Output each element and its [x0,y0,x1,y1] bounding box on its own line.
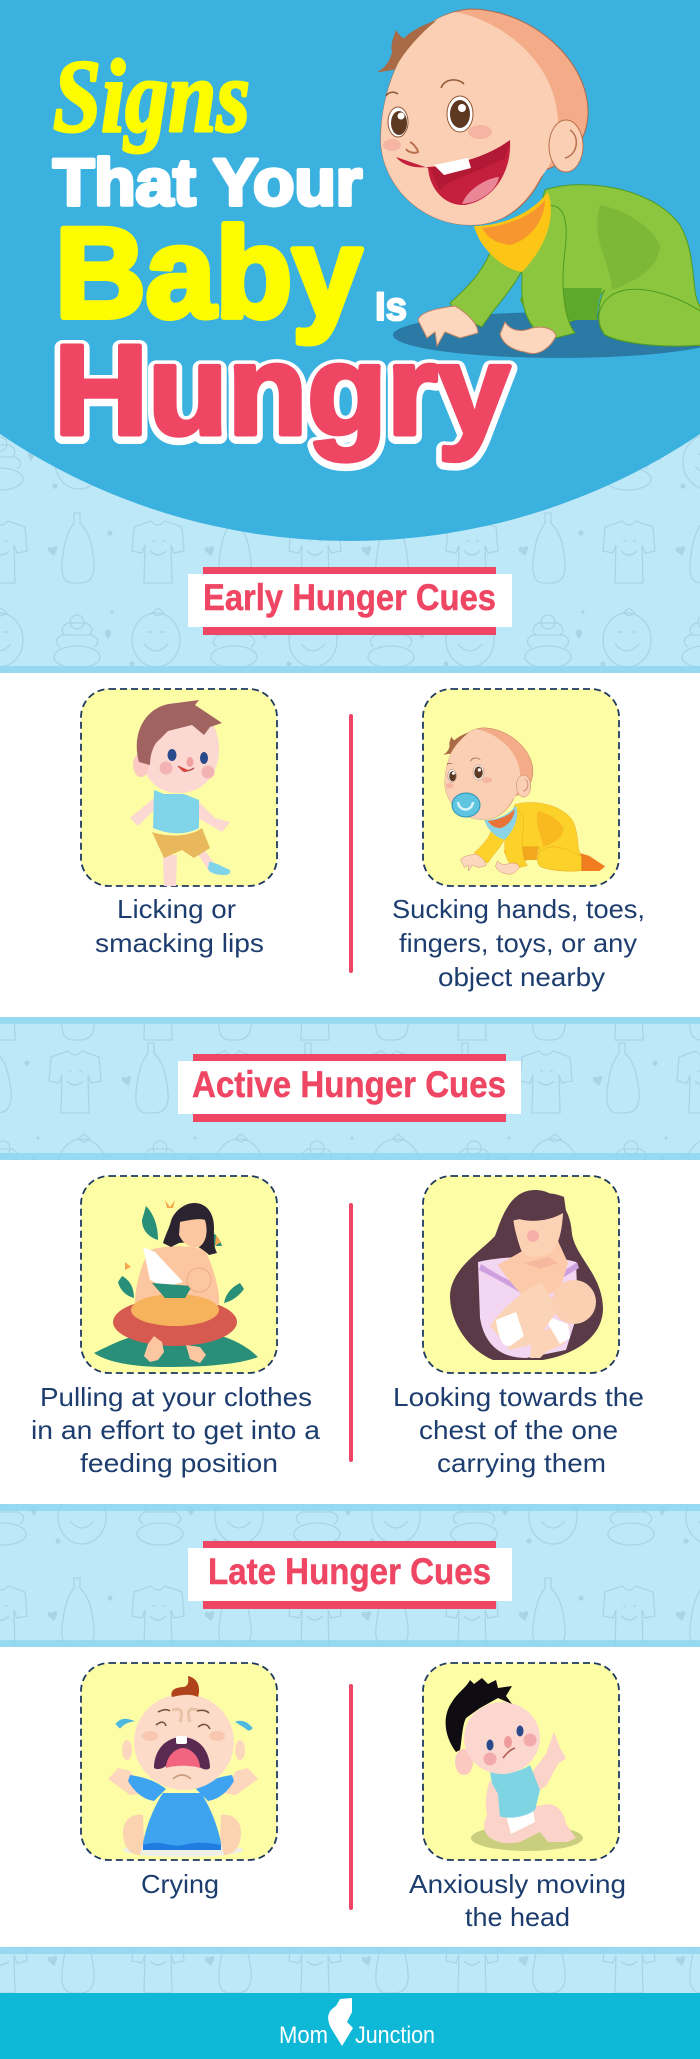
title: Hungry [54,319,510,462]
text: looking towards [393,1382,644,1478]
title: Hungry [54,321,510,464]
text: looking towards: chest of the one [419,1415,618,1445]
text: sucking hands: object nearby [438,962,605,992]
divider [349,1203,353,1462]
heading: early hunger cues [188,567,512,635]
section: early hunger cues [0,567,700,1024]
text: licking or smacking lips: smacking lips [95,928,264,958]
text: sucking hands: Sucking hands, toes, [392,894,645,924]
logo: mom junction: Junction [355,2022,435,2049]
text: pulling at your clothes: Pulling at your clothes [40,1382,312,1412]
header: blue arc background [0,0,700,541]
heading: early hunger cues: Early Hunger Cues [203,577,496,618]
divider [349,1684,353,1910]
text: anxiously moving the head [409,1869,626,1932]
title [53,39,510,464]
heading: active hunger cues [178,1054,521,1122]
text: licking or smacking lips: Licking or [117,894,236,924]
card: anxiously moving head [423,1663,619,1860]
text: looking towards: Looking towards the [393,1382,644,1412]
heading: active hunger cues: Active Hunger Cues [192,1064,506,1105]
text: anxiously moving the head: the head [465,1902,570,1932]
card: sucking hands [423,689,619,886]
title: Signs [53,39,250,154]
heading: late hunger cues: Late Hunger Cues [208,1551,491,1592]
logo: mom junction: Mom [279,2022,328,2049]
text: sucking hands [392,894,645,992]
card: crying baby [81,1663,277,1860]
text: licking or smacking lips [95,894,264,958]
section: late hunger cues [0,1541,700,1954]
card: mother holding baby [423,1176,619,1373]
text: crying: Crying [141,1869,219,1899]
text: anxiously moving the head: Anxiously moving [409,1869,626,1899]
section: active hunger cues [0,1054,700,1511]
title: Baby [55,202,362,345]
logo: mom junction [279,1998,435,2049]
text: sucking hands: fingers, toys, or any [399,928,637,958]
text: pulling at your clothes: in an effort to get into a [31,1415,321,1445]
illustration: crawling baby [377,9,700,358]
divider [349,714,353,973]
title: Is [375,285,407,329]
text: looking towards: carrying them [437,1448,606,1478]
card: mother nursing cross-legged [81,1176,277,1373]
text: pulling at your clothes: feeding position [80,1448,278,1478]
heading: late hunger cues [188,1541,512,1609]
card: licking lips [81,689,277,886]
title: That Your [53,145,362,219]
footer [0,1993,700,2059]
text: pulling at your clothes [31,1382,321,1478]
